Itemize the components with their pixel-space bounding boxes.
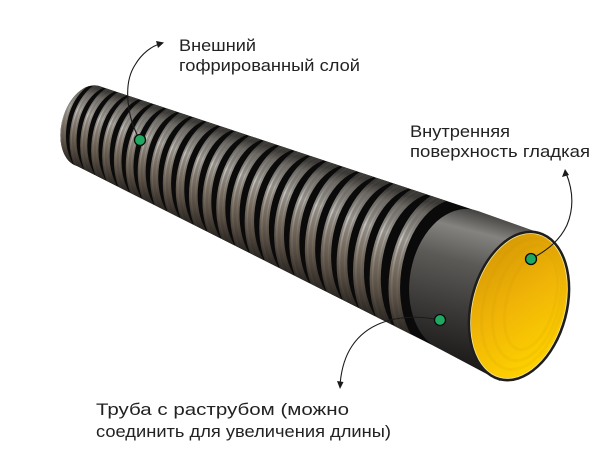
arrowhead: [562, 169, 569, 177]
arrowhead: [337, 381, 344, 389]
label: outer corrugated layer: гофрированный слой: [179, 57, 360, 75]
label: socket: соединить для увеличения длины): [96, 423, 391, 441]
label: socket: Труба с раструбом (можно: [96, 401, 349, 419]
outer corrugated ribs: [60, 85, 446, 334]
yellow inner surface: [455, 223, 583, 389]
marker: socket: [434, 314, 446, 326]
marker: outer layer: [134, 134, 146, 146]
marker: inner surface: [526, 254, 536, 264]
label: inner smooth surface: Внутренняя: [410, 123, 510, 141]
pipe core: [60, 85, 480, 349]
corrugated pipe: [60, 85, 570, 382]
infographic: [60, 38, 589, 440]
leader: inner smooth surface: [531, 169, 572, 259]
label: inner smooth surface: поверхность гладкая: [410, 143, 590, 161]
leader: outer corrugated layer: [128, 41, 164, 140]
arrowhead: [156, 41, 164, 48]
inner rings: [468, 229, 578, 379]
pipe mouth rim: [452, 219, 586, 393]
socket bell: [409, 209, 560, 381]
leader: socket: [337, 317, 440, 389]
label: outer corrugated layer: Внешний: [179, 37, 256, 55]
